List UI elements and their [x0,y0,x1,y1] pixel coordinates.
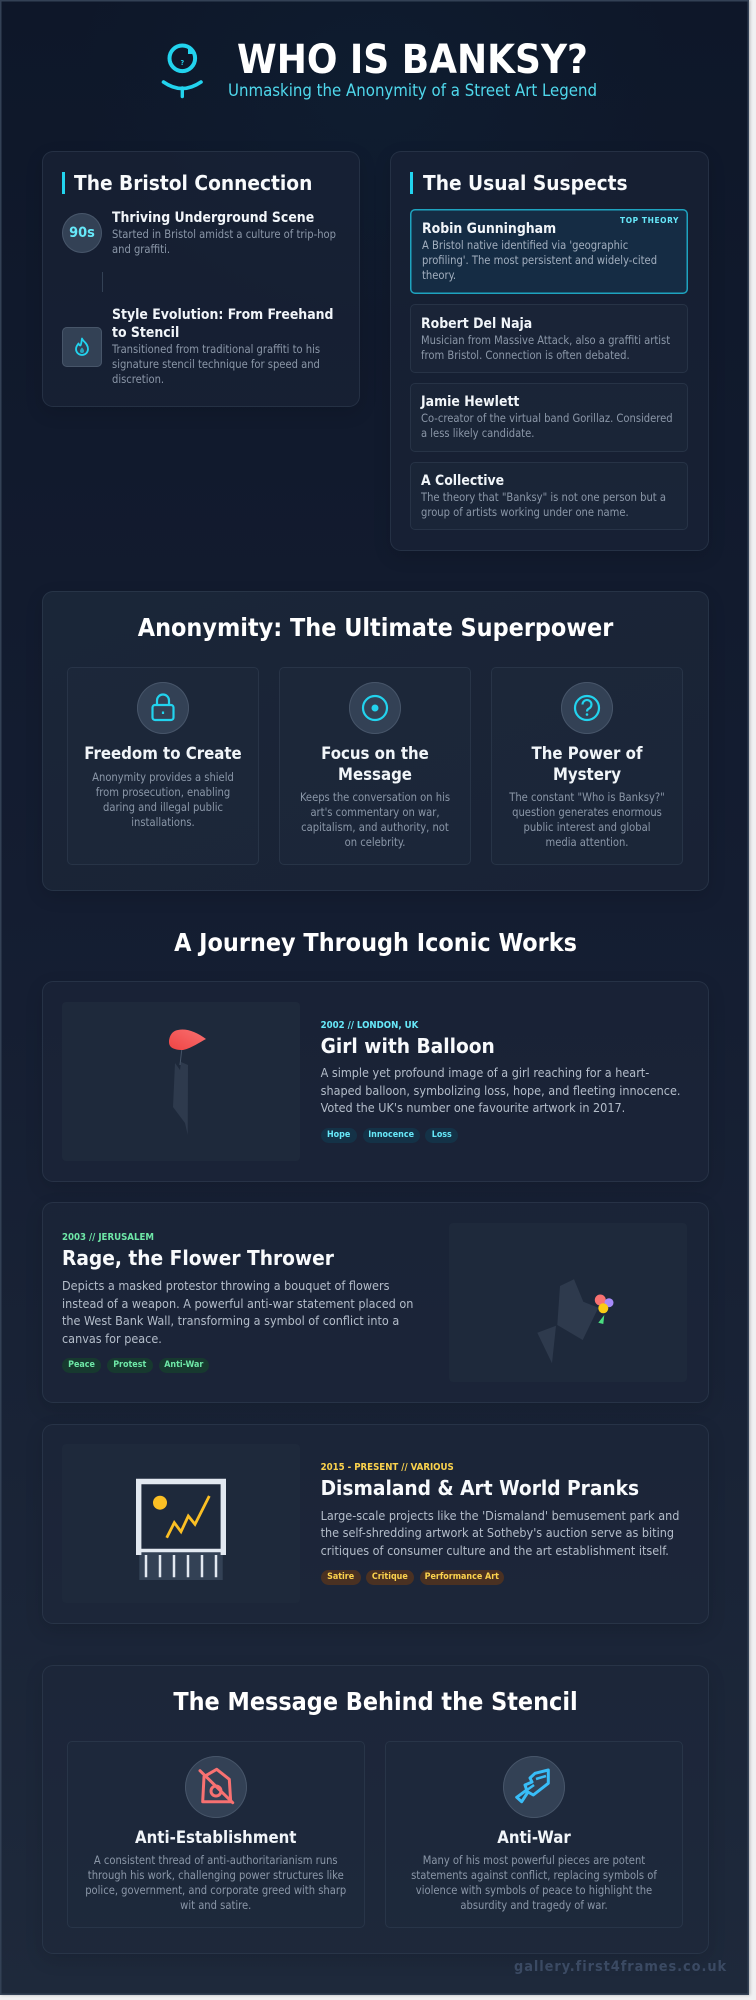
main title: WHO IS BANKSY? [237,37,588,83]
icon: crossed-out building [185,1756,247,1818]
suspect text [421,490,666,518]
card text: through his work, challenging power structures like [88,1869,344,1882]
card text: Anonymity provides a shield [92,770,234,784]
item text: style evolution: signature stencil technique for speed and [112,358,320,370]
tag [321,1570,361,1585]
suspect name: Robin Gunningham [422,221,556,237]
work title: Girl with Balloon [321,1034,495,1058]
card text: police, government, and corporate greed with sharp [85,1884,346,1897]
panel: girl with balloon [42,981,709,1182]
timeline connector [102,272,103,292]
work text [62,1278,413,1346]
work details [320,1462,679,1585]
item title: style evolution: Style Evolution: From Freehand [112,307,333,323]
work text: Depicts a masked protestor throwing a bouquet of flowers [62,1278,389,1293]
work title: Dismaland & Art World Pranks [321,1476,639,1500]
card text [509,790,665,848]
card text: statements against conflict, replacing symbols of [411,1869,657,1882]
suspect card: Jamie Hewlett [410,383,688,452]
suspect text: Musician from Massive Attack, also a graffiti artist [421,334,670,346]
tag: Performance Art [425,1572,499,1582]
panel: Dismaland and pranks [42,1424,709,1624]
suspect text [421,412,673,440]
badge: flame icon [62,327,102,367]
card text [300,790,450,848]
tag [321,1128,357,1143]
suspect text: A Bristol native identified via 'geographic [422,238,628,252]
card text: The constant "Who is Banksy?" [509,790,665,804]
suspect text: The theory that "Banksy" is not one person but a [421,490,666,504]
card title: Freedom to Create [84,744,242,763]
item text: underground scene [112,228,336,256]
panel: rage, the flower thrower [42,1202,709,1403]
card title: Anti-War [497,1828,571,1847]
suspect text: a less likely candidate. [421,426,534,440]
suspect card: Robin Gunningham [410,209,688,294]
date and place: 2003 // JERUSALEM [62,1232,154,1243]
card text: installations. [131,816,195,828]
work text: canvas for peace. [62,1331,162,1346]
card text [92,770,234,828]
card text: on celebrity. [345,836,405,848]
card title: Mystery [553,764,621,784]
card text: capitalism, and authority, not [301,820,449,834]
heading: the message: The Message Behind the Stencil [173,1686,578,1716]
item text: underground scene: and graffiti. [112,242,170,256]
panel: the Bristol connection [42,151,360,407]
card title [321,744,429,784]
item title: style evolution [112,307,333,341]
work text: Voted the UK's number one favourite artwork in 2017. [321,1100,625,1115]
work text: A simple yet profound image of a girl reaching for a heart- [321,1065,649,1080]
work title: Rage, the Flower Thrower [62,1246,334,1270]
card title: Focus on the [321,744,429,763]
work text: Large-scale projects like the 'Dismaland' bemusement park and [321,1508,679,1523]
item title: style evolution: to Stencil [112,325,179,341]
card: focus on the message [279,667,471,865]
work text: the self-shredding artwork at Sotheby's auction serve as biting [321,1525,674,1540]
panel: the usual suspects [390,151,709,551]
card text: violence with symbols of peace to highlight the [416,1884,652,1897]
item text: style evolution: discretion. [112,372,164,386]
tag: Satire [327,1572,354,1582]
heading: the Bristol connection: The Bristol Connection [74,171,312,195]
tag [62,1358,101,1373]
heading: the usual suspects: The Usual Suspects [423,171,628,195]
card title: Anti-Establishment [135,1828,296,1847]
suspect text [422,238,657,282]
suspect text: Co-creator of the virtual band Gorillaz. Considered [421,412,673,424]
artwork: girl with balloon [62,1002,300,1161]
artwork: shredded painting [62,1444,300,1603]
tag: Peace [68,1360,95,1370]
date and place: 2015 - PRESENT // VARIOUS [321,1462,454,1473]
card: anti-war [385,1741,683,1928]
item title: underground scene: Thriving Underground Scene [112,210,314,226]
item text: underground scene: Started in Bristol amidst a culture of trip-hop [112,228,336,240]
badge: 90s [62,213,102,253]
icon: lock [137,682,189,734]
tag: Hope [327,1130,350,1140]
item text: style evolution [112,342,320,386]
suspect text: theory. [422,268,456,282]
card title: The Power of [532,744,642,763]
card text: from prosecution, enabling [96,786,230,798]
suspect name: Robert Del Naja [421,316,532,332]
card text: absurdity and tragedy of war. [460,1899,608,1912]
icon: question mark [561,682,613,734]
heading: anonymity: Anonymity: The Ultimate Superpower [138,613,613,642]
card text [411,1854,658,1912]
card text: question generates enormous [512,806,662,818]
icon: quill [503,1756,565,1818]
work text: shaped balloon, symbolizing loss, hope, and fleeting innocence. [321,1083,680,1098]
header logo icon [162,44,203,98]
header logo icon: ? [180,59,184,67]
work text [320,1065,680,1115]
work text [320,1508,679,1558]
icon: target [349,682,401,734]
card text [85,1854,346,1912]
tag [159,1358,209,1373]
card text: wit and satire. [180,1899,251,1912]
tag [420,1570,504,1585]
suspect text: profiling'. The most persistent and widely-cited [422,254,657,266]
tag: Innocence [368,1130,414,1140]
tag: Critique [372,1572,408,1582]
tag [425,1128,458,1143]
suspect text: group of artists working under one name. [421,506,629,518]
card text: art's commentary on war, [310,806,440,818]
suspect text [421,334,670,362]
work text: instead of a weapon. A powerful anti-war statement placed on [62,1296,413,1311]
suspect card: a collective [410,462,688,530]
subtitle: Unmasking the Anonymity of a Street Art Legend [228,81,597,100]
accent bar [62,172,65,194]
card text: public interest and global [523,820,651,834]
date and place: 2002 // LONDON, UK [321,1020,418,1031]
work text: critiques of consumer culture and the art establishment itself. [321,1543,669,1558]
work details [62,1232,413,1373]
panel: anonymity [42,591,709,891]
suspect name: Jamie Hewlett [421,394,519,410]
tag: Loss [432,1130,452,1140]
card title: Message [338,764,412,784]
icon: flame [75,338,89,356]
footer credit: gallery.first4frames.co.uk [514,1959,727,1975]
tag: Anti-War [164,1360,203,1370]
card text: media attention. [546,836,628,848]
artwork: flower thrower [449,1223,687,1382]
card: anti-establishment [67,1741,364,1928]
card: power of mystery [491,667,683,865]
suspect text: from Bristol. Connection is often debated. [421,348,630,362]
card: freedom to create [67,667,259,865]
badge: top theory: TOP THEORY [620,215,679,225]
card text: daring and illegal public [103,800,223,814]
item text: style evolution: Transitioned from traditional graffiti to his [112,342,320,356]
work text: the West Bank Wall, transforming a symbol of conflict into a [62,1313,399,1328]
card text: Keeps the conversation on his [300,790,450,804]
panel: the message [42,1665,709,1954]
suspect name: A Collective [421,473,504,489]
suspect card: Robert Del Naja [410,304,688,373]
badge: 90s: 90s [69,225,95,241]
tag: Protest [113,1360,146,1370]
card text: Many of his most powerful pieces are potent [423,1854,645,1867]
tag [107,1358,152,1373]
heading: iconic works: A Journey Through Iconic Works [174,928,577,957]
tag [363,1128,420,1143]
work details [320,1020,680,1143]
card title [532,744,643,784]
tag [366,1570,414,1585]
card text: A consistent thread of anti-authoritarianism runs [94,1854,338,1867]
accent bar [410,172,413,194]
